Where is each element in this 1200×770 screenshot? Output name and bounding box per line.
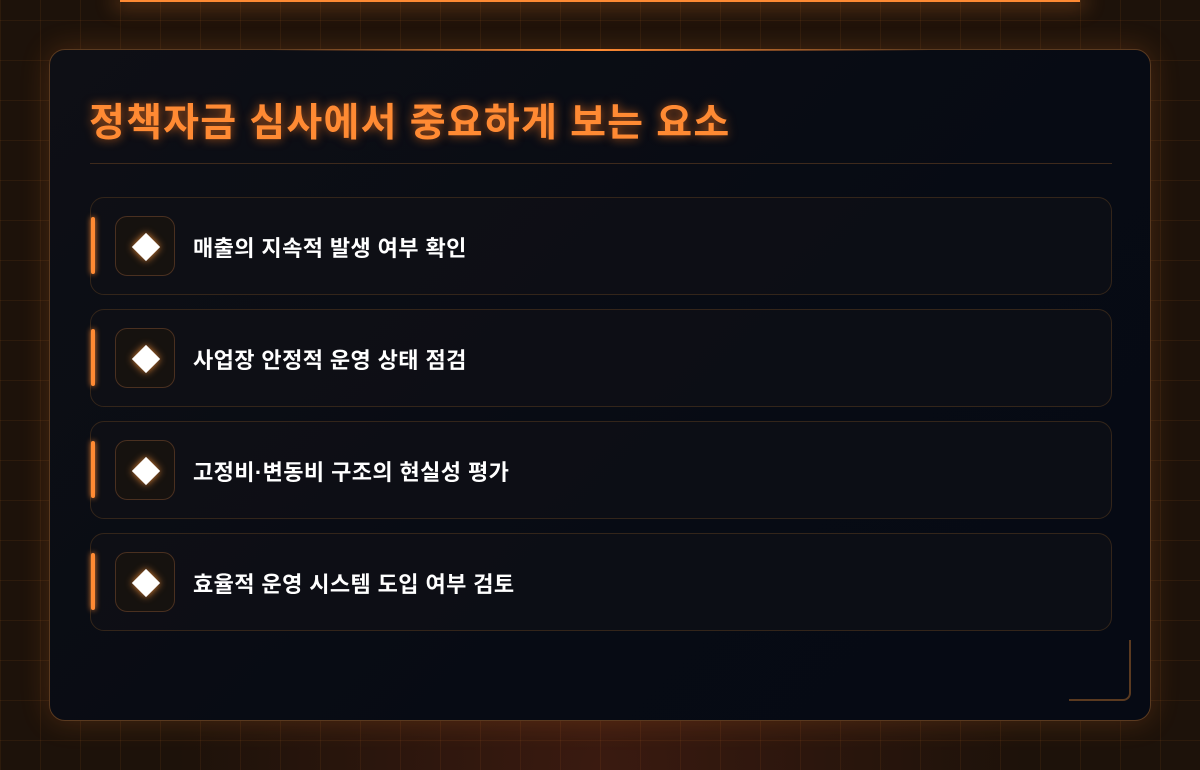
icon: diamond	[115, 440, 175, 500]
item 3	[90, 421, 1112, 519]
icon: diamond	[115, 216, 175, 276]
corner bracket	[1069, 640, 1131, 701]
text: 효율적 운영 시스템 도입 여부 검토	[193, 572, 515, 597]
item 4	[90, 533, 1112, 631]
text: 고정비·변동비 구조의 현실성 평가	[193, 460, 509, 485]
text: 매출의 지속적 발생 여부 확인	[193, 236, 467, 261]
text: 사업장 안정적 운영 상태 점검	[193, 348, 467, 373]
icon: diamond	[115, 328, 175, 388]
icon: diamond	[115, 552, 175, 612]
item 2	[90, 309, 1112, 407]
item 1	[90, 197, 1112, 295]
title: 정책자금 심사에서 중요하게 보는 요소	[89, 102, 730, 145]
